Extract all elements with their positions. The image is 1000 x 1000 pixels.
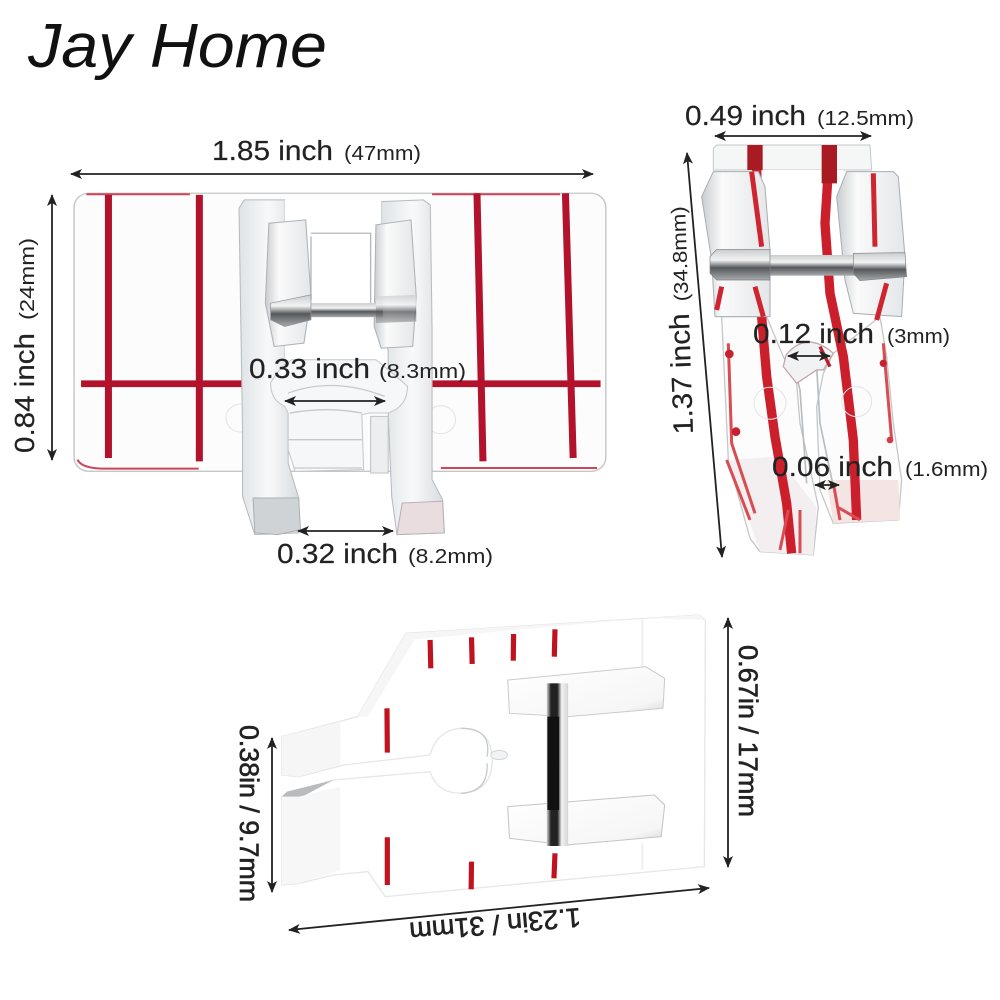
arrow: toe gap [298, 530, 393, 532]
label: foot length: 1.23in / 31mm [408, 902, 582, 947]
arrow: height [51, 195, 53, 460]
label: toe height: 0.38in / 9.7mm [234, 725, 264, 902]
illustration: wide transparent foot with red grid [74, 193, 606, 535]
label: toe gap: 0.32 inch [277, 538, 398, 569]
label: overall width [212, 135, 421, 166]
panel: border guide foot [9, 135, 606, 569]
arrow: length [687, 153, 722, 557]
label: centre gap: (8.3mm) [379, 361, 466, 383]
label: toe gap [277, 538, 493, 569]
arrow: toe height [271, 738, 273, 892]
arrow: overall width [71, 173, 593, 175]
label: height [9, 238, 40, 453]
label: slot width: 0.12 inch [753, 318, 874, 349]
label: toe width: (1.6mm) [905, 459, 988, 481]
label: slot width: (3mm) [887, 326, 950, 348]
arrow: foot height [727, 618, 729, 867]
title: Jay Home: Jay Home [27, 12, 327, 81]
arrow: toe width [815, 484, 839, 486]
arrow: foot length [289, 888, 709, 930]
label: centre gap [249, 353, 466, 384]
label: height: 0.84 inch [9, 333, 40, 453]
label: length [660, 206, 699, 435]
label: toe width [772, 451, 988, 482]
label: centre gap: 0.33 inch [249, 353, 370, 384]
panel: narrow stripe foot [660, 100, 988, 557]
illustration: clear foot with red ticks [282, 615, 705, 897]
illustration: narrow foot with red stripes [702, 145, 907, 555]
label: toe gap: (8.2mm) [408, 546, 493, 568]
label: overall width: 1.85 inch [212, 135, 333, 166]
label: length: 1.37 inch [664, 313, 699, 435]
label: top width: 0.49 inch [685, 100, 806, 131]
label: foot height: 0.67in / 17mm [733, 645, 763, 817]
panel: open toe foot [234, 615, 763, 947]
label: height: (24mm) [17, 238, 39, 320]
label: slot width [753, 318, 950, 349]
arrow: slot width [788, 355, 830, 357]
label: top width: (12.5mm) [817, 108, 914, 130]
arrow: top width [715, 135, 871, 137]
label: overall width: (47mm) [344, 143, 421, 165]
label: length: (34.8mm) [668, 206, 693, 302]
arrow: centre gap [285, 400, 385, 402]
label: toe width: 0.06 inch [772, 451, 893, 482]
label: top width [685, 100, 914, 131]
